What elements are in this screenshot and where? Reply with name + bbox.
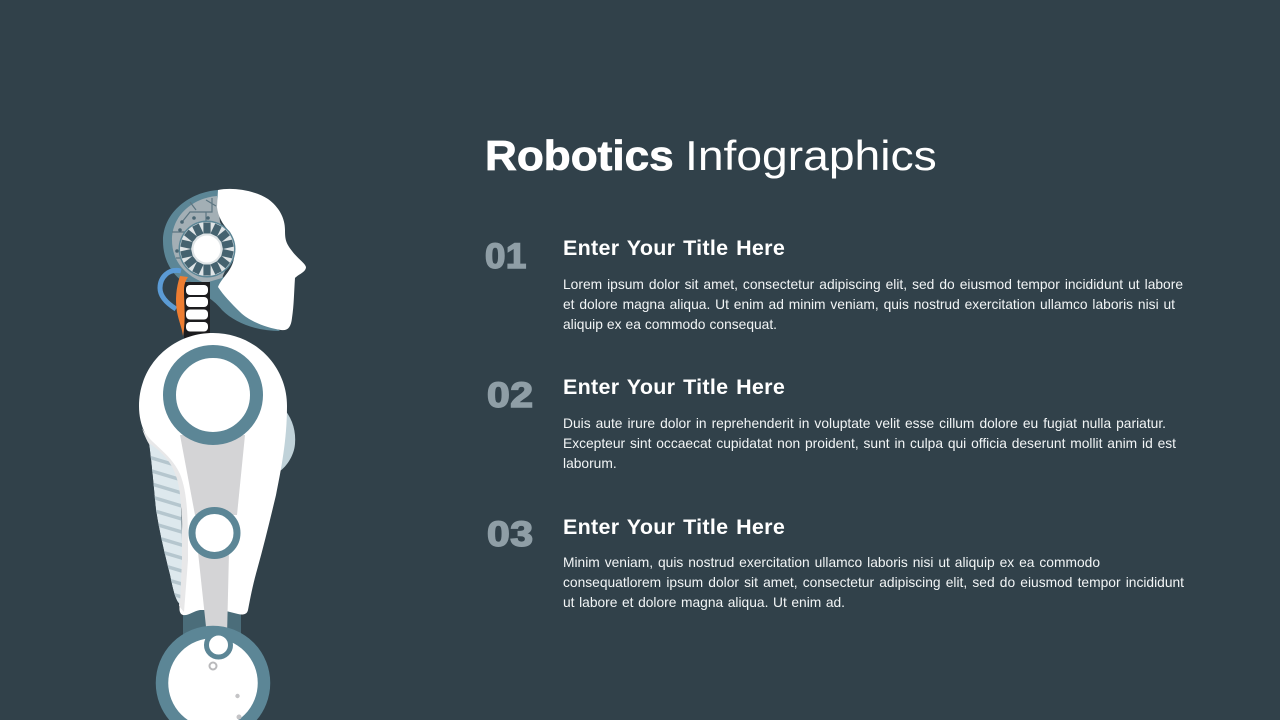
robot illustration: [139, 188, 306, 720]
gear: [178, 220, 236, 278]
body text 2: Duis aute irure dolor in reprehenderit in voluptate velit esse cillum dolore eu fugiat nulla pariatur.: [563, 416, 1166, 431]
upper arm strut: [180, 435, 245, 515]
waist ring: [192, 510, 237, 556]
chest ring: [170, 352, 256, 438]
skull back: [163, 190, 280, 331]
robot head: [163, 189, 306, 331]
hip connector: [183, 605, 241, 645]
heading 2: Enter Your Title Here: [563, 375, 785, 399]
orange cable: [176, 276, 188, 336]
neck: [184, 282, 210, 340]
head face: [217, 189, 306, 330]
torso: [139, 333, 287, 615]
body text 2: [563, 416, 1176, 471]
body text 3: ut labore et dolore magna aliqua. Ut enim ad.: [563, 595, 845, 610]
lower arm strut: [198, 552, 229, 636]
body text 1: aliquip ex ea commodo consequat.: [563, 317, 777, 332]
striped side panel: [149, 444, 182, 604]
hip joint ring: [206, 633, 230, 657]
circuit brain: [172, 196, 234, 287]
title: Infographics: [685, 132, 937, 179]
number 02: 02: [487, 376, 533, 415]
title: Robotics: [485, 132, 674, 179]
body text 2: Excepteur sint occaecat cupidatat non proident, sunt in culpa qui officia deserunt mollit anim id est: [563, 436, 1176, 451]
pelvis: [162, 632, 264, 720]
title: [485, 132, 937, 179]
body text 1: [563, 277, 1183, 332]
body text 1: et dolore magna aliqua. Ut enim ad minim veniam, quis nostrud exercitation ullamco laboris nisi ut: [563, 297, 1175, 312]
body text 1: Lorem ipsum dolor sit amet, consectetur adipiscing elit, sed do eiusmod tempor incididunt ut labore: [563, 277, 1183, 292]
number 01: 01: [485, 237, 527, 276]
back plate: [277, 410, 295, 473]
torso side trim: [142, 428, 188, 612]
number 03: 03: [487, 515, 533, 554]
body text 3: [563, 555, 1184, 610]
heading 1: Enter Your Title Here: [563, 236, 785, 260]
body text 3: Minim veniam, quis nostrud exercitation ullamco laboris nisi ut aliquip ex ea commodo: [563, 555, 1100, 570]
body text 2: laborum.: [563, 456, 617, 471]
body text 3: consequatlorem ipsum dolor sit amet, consectetur adipiscing elit, sed do eiusmod tempor incididunt: [563, 575, 1184, 590]
blue cable: [160, 270, 181, 309]
heading 3: Enter Your Title Here: [563, 515, 785, 539]
